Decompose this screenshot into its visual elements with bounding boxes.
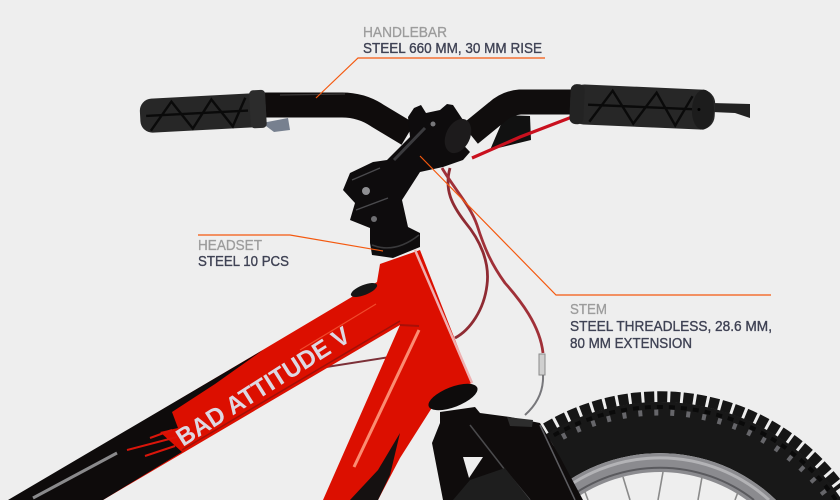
handlebar — [262, 94, 575, 158]
frame decal text: BAD ATTITUDE V — [171, 321, 356, 452]
callout: headset: STEEL 10 PCS — [198, 254, 289, 270]
front wheel — [472, 397, 840, 500]
callout: stem: STEM — [570, 302, 607, 318]
callout: handlebar: HANDLEBAR — [363, 25, 447, 41]
callout: headset: HEADSET — [198, 238, 262, 254]
brake cables — [320, 168, 545, 415]
callout: headset — [198, 235, 383, 270]
stem and headset — [343, 104, 476, 258]
callout: stem — [420, 156, 772, 352]
callout: stem: STEEL THREADLESS, 28.6 MM, — [570, 319, 772, 335]
left grip — [139, 90, 267, 134]
callout: stem: 80 MM EXTENSION — [570, 336, 692, 352]
callout: handlebar — [316, 25, 545, 98]
callout: handlebar: STEEL 660 MM, 30 MM RISE — [363, 41, 542, 57]
fork and brake arch — [425, 378, 583, 500]
frame — [8, 250, 472, 500]
right grip and lever — [569, 84, 750, 130]
